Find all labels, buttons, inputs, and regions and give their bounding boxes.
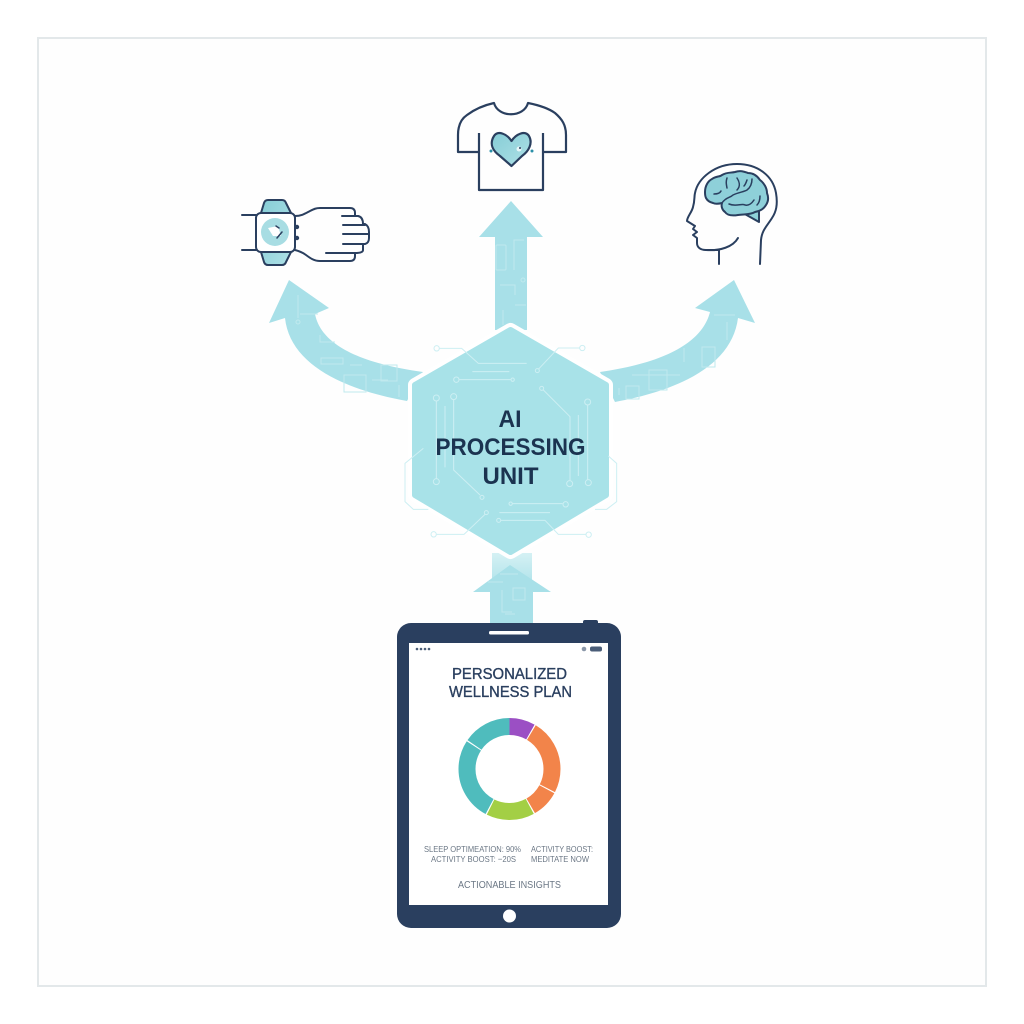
plan metrics: MEDITATE NOW — [531, 854, 589, 864]
plan metrics: ACTIVITY BOOST: −20S — [431, 854, 516, 864]
plan metrics — [424, 844, 593, 864]
tablet power button — [583, 620, 598, 626]
plan title: PERSONALIZED — [452, 666, 567, 683]
tablet — [397, 620, 621, 928]
arrow: up to smart shirt — [479, 201, 543, 330]
plan title — [449, 666, 572, 701]
arrow: right to brain — [600, 280, 755, 402]
plan metrics: SLEEP OPTIMEATION: 90% — [424, 844, 521, 854]
tablet body — [397, 623, 621, 928]
plan metrics: ACTIVITY BOOST: — [531, 844, 593, 854]
actionable insights label: ACTIONABLE INSIGHTS — [458, 880, 561, 891]
hexagon label — [436, 406, 586, 490]
tablet screen — [409, 643, 608, 905]
hexagon label: UNIT — [482, 463, 539, 490]
circuit traces — [405, 345, 617, 537]
tablet speaker — [489, 631, 529, 634]
arrow: left to smartwatch — [269, 280, 423, 401]
donut chart — [467, 726, 552, 812]
arrow: up from tablet — [473, 553, 551, 624]
status bar — [416, 646, 602, 652]
plan title: WELLNESS PLAN — [449, 684, 572, 701]
icon: head with brain — [687, 164, 777, 264]
hexagon: AI processing unit — [405, 330, 617, 552]
tablet home button — [503, 910, 516, 922]
hexagon label: AI — [498, 406, 522, 433]
hexagon label: PROCESSING — [436, 434, 586, 461]
icon: smart shirt with heart — [458, 103, 566, 190]
icon: smartwatch on wrist — [242, 200, 369, 265]
